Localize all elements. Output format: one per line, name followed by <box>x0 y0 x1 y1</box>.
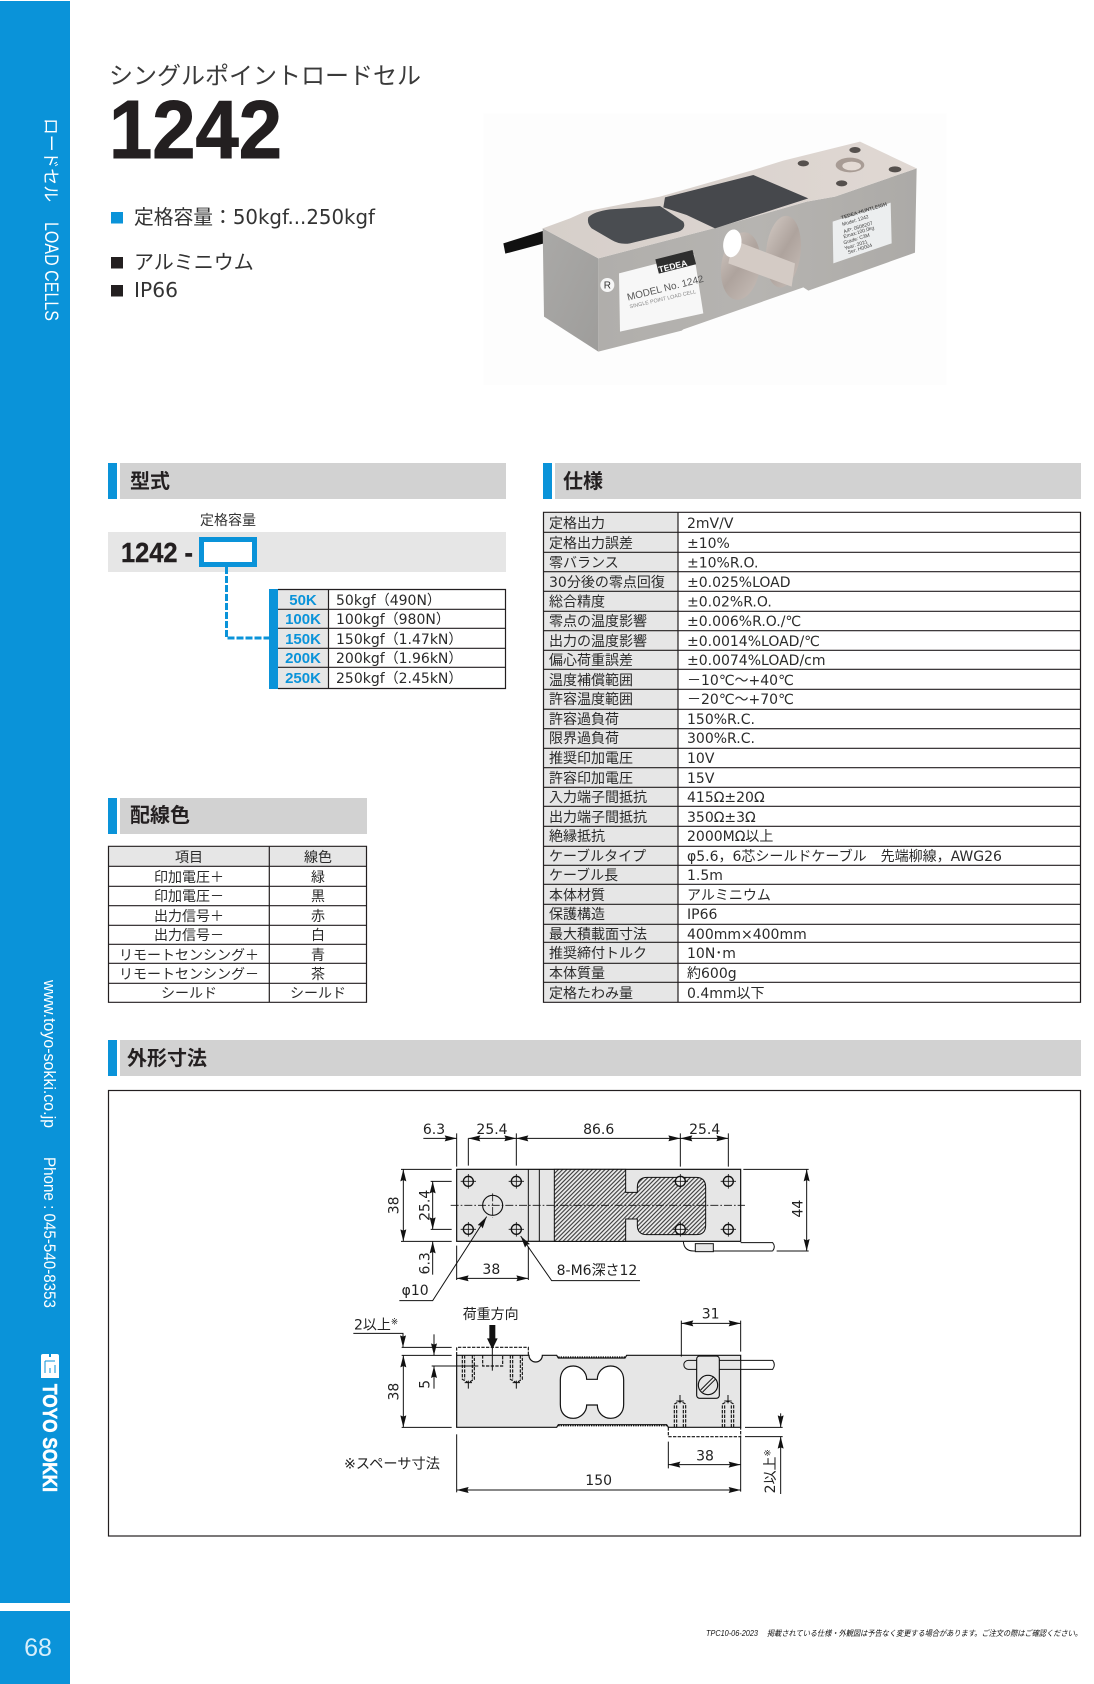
spacer dimension note: ※スペーサ寸法 <box>344 1456 440 1472</box>
leader: M6 threads <box>521 1236 640 1281</box>
row: 青 <box>311 948 325 964</box>
option 100K: 100K <box>285 611 321 628</box>
left dimension lines and values: 25.4 <box>417 1190 433 1221</box>
spec row: 10N･m <box>687 946 736 962</box>
top dimension line and values: 86.6 <box>583 1122 614 1138</box>
row: 茶 <box>311 966 325 983</box>
dimensions panel frame <box>108 1090 1080 1536</box>
spacer note bottom right: 2以上 <box>763 1456 779 1493</box>
product photo: load cell <box>483 113 947 385</box>
row <box>154 870 325 886</box>
left dimension lines and values: 38 <box>386 1196 402 1214</box>
spec row: 15V <box>687 771 715 787</box>
header row: 線色 <box>304 850 332 866</box>
spec row <box>549 574 791 591</box>
spec row: 1.5m <box>687 868 723 884</box>
spec row: 350Ω±3Ω <box>687 810 756 826</box>
dimension drawing: side view <box>344 1306 783 1494</box>
section heading: specifications <box>543 463 1081 499</box>
row: 印加電圧＋ <box>154 870 224 886</box>
spec row: ±10% <box>687 536 730 552</box>
cable stub <box>683 1241 774 1252</box>
section heading: model code <box>108 463 506 499</box>
row: シールド <box>290 986 346 1002</box>
cable and clamp <box>684 1356 774 1398</box>
spec row: 10V <box>687 751 715 767</box>
spec row: 許容温度範囲 <box>549 691 633 708</box>
mounting holes <box>461 1174 736 1237</box>
spec row <box>549 653 826 669</box>
side label: Model: 1242 <box>841 214 870 228</box>
spec row: 30分後の零点回復 <box>549 574 665 591</box>
long side face <box>598 168 917 352</box>
load direction arrow: 荷重方向 <box>463 1307 519 1323</box>
spec row: 約600g <box>687 966 737 982</box>
spec row: 偏心荷重誤差 <box>549 653 633 669</box>
model code prefix: 1242 - <box>121 537 193 568</box>
row: 出力信号－ <box>154 928 224 944</box>
spec row: アルミニウム <box>687 888 771 904</box>
spec row: 本体材質 <box>549 887 605 904</box>
spacer note top <box>353 1317 452 1427</box>
hatched strain area <box>554 1169 706 1241</box>
option 50K: 50K <box>289 592 317 609</box>
spec row: 限界過負荷 <box>549 731 619 747</box>
leader: 10 mm hole <box>399 1217 487 1301</box>
row <box>161 986 346 1002</box>
spec row <box>549 945 736 962</box>
spec row: 150%R.C. <box>687 712 755 728</box>
header row: 項目 <box>175 850 203 866</box>
spec row: ±0.02%R.O. <box>687 594 772 610</box>
feature: protection: IP66 <box>134 278 178 302</box>
dimension drawing: top view <box>386 1122 809 1301</box>
spec row <box>549 691 794 708</box>
title: model number: 1242 <box>109 83 282 176</box>
leader: 10 mm hole: φ10 <box>402 1283 429 1299</box>
top dimension line and values: 25.4 <box>689 1122 720 1138</box>
spec row: ±10%R.O. <box>687 556 758 572</box>
spec row <box>549 672 794 689</box>
cable <box>503 231 544 254</box>
subtitle: シングルポイントロードセル <box>109 63 421 90</box>
row <box>154 909 325 925</box>
option 100K <box>285 611 450 628</box>
150 overall dimension: 150 <box>585 1473 612 1489</box>
spec row: 推奨締付トルク <box>549 945 647 962</box>
option 150K: 150kgf（1.47kN） <box>336 632 462 648</box>
spec row <box>549 536 730 552</box>
feature: material: アルミニウム <box>134 252 254 274</box>
spec row: －10℃～+40℃ <box>687 673 794 689</box>
centre hole <box>483 1195 503 1215</box>
spec row <box>549 594 772 610</box>
row <box>154 928 325 944</box>
top dimension line and values: 25.4 <box>476 1122 508 1138</box>
row <box>154 889 325 905</box>
side label <box>833 201 892 263</box>
spec row: 最大積載面寸法 <box>549 927 647 943</box>
row: 赤 <box>311 909 325 925</box>
spec row <box>549 848 1002 865</box>
option 250K: 250kgf（2.45kN） <box>336 671 462 687</box>
spacers dashed <box>457 1347 741 1437</box>
option 150K: 150K <box>285 631 321 648</box>
R mark <box>600 278 614 292</box>
spec row: ±0.0074%LOAD/cm <box>687 653 826 669</box>
spec row: 零点の温度影響 <box>549 614 647 630</box>
feature: protection <box>111 278 178 302</box>
38 bottom dimension: 38 <box>696 1449 714 1465</box>
spec row: 入力端子間抵抗 <box>549 790 647 806</box>
31 dimension: 31 <box>702 1306 720 1322</box>
spec row <box>549 770 715 787</box>
front label: SINGLE POINT LOAD CELL <box>629 289 697 310</box>
sidebar text: phone: Phone : 045-540-8353 <box>40 1157 59 1308</box>
left dimension lines and values <box>386 1169 452 1275</box>
spec row <box>549 790 765 806</box>
page number block: 68 <box>24 1634 52 1662</box>
spec row: 本体質量 <box>549 965 605 982</box>
5 depth dimension <box>417 1334 478 1389</box>
spec row: 保護構造 <box>549 907 605 923</box>
5 depth dimension: 5 <box>417 1380 433 1389</box>
spec row: ケーブルタイプ <box>549 848 646 865</box>
row: 白 <box>311 928 325 944</box>
spec row: －20℃～+70℃ <box>687 692 794 708</box>
top face <box>543 142 917 258</box>
spec row <box>549 556 758 572</box>
spec row <box>549 907 717 923</box>
spec row: 絶縁抵抗 <box>549 828 605 845</box>
header row <box>175 850 332 866</box>
spec row: 温度補償範囲 <box>549 672 633 689</box>
spec row: 定格出力誤差 <box>549 536 633 552</box>
dashed connector <box>226 567 269 638</box>
spec row: ±0.006%R.O./℃ <box>687 614 801 630</box>
spec row <box>549 711 755 728</box>
front label <box>619 250 705 332</box>
row <box>119 948 325 964</box>
spec row <box>549 828 773 845</box>
front label: MODEL No. 1242 <box>626 274 705 304</box>
company logo wordmark: TOYO SOKKI <box>38 1384 60 1492</box>
31 dimension <box>681 1306 741 1357</box>
top mounting holes <box>798 147 901 186</box>
spec row <box>549 634 820 650</box>
top view body <box>457 1169 741 1241</box>
top dimension line and values: 6.3 <box>423 1122 445 1138</box>
spacer note top: ※ <box>391 1318 398 1328</box>
centre recess <box>483 1348 503 1371</box>
spec row <box>549 867 723 884</box>
spec row: ±0.0014%LOAD/℃ <box>687 634 820 650</box>
spec row: IP66 <box>687 907 717 923</box>
option 100K: 100kgf（980N） <box>336 612 450 628</box>
model code diagram <box>108 512 506 689</box>
side label: Grade: C3M <box>843 233 871 246</box>
sidebar text: website: www.toyo-sokki.co.jp <box>40 979 59 1128</box>
row: 黒 <box>311 889 325 905</box>
through cut-out <box>717 214 804 302</box>
spec row <box>549 751 715 767</box>
38 height dimension <box>386 1355 403 1427</box>
side view body <box>457 1355 741 1427</box>
sidebar text: category <box>40 118 61 321</box>
spec row: 定格出力 <box>549 516 605 532</box>
38 bottom dimension <box>668 1437 741 1492</box>
option 250K <box>285 670 462 687</box>
bottom 38 dimension <box>457 1246 528 1280</box>
option 50K: 50kgf（490N） <box>336 593 441 609</box>
capacity label: 定格容量 <box>200 512 256 528</box>
side label: A/P: 0508207 <box>843 221 874 235</box>
spec row <box>549 731 755 747</box>
spec row: 400mm×400mm <box>687 927 807 943</box>
spec row: φ5.6，6芯シールドケーブル 先端柳線，AWG26 <box>687 848 1002 865</box>
row: 印加電圧－ <box>154 889 224 905</box>
top dimension line and values <box>423 1122 728 1167</box>
spec row: 推奨印加電圧 <box>549 751 633 767</box>
spec row <box>549 927 807 943</box>
blank code box <box>202 540 254 564</box>
spec row: 出力の温度影響 <box>549 634 647 650</box>
threaded holes <box>462 1355 734 1427</box>
spec row <box>549 516 734 532</box>
spec row: 許容過負荷 <box>549 711 619 728</box>
section heading: dimensions <box>108 1040 1081 1076</box>
side label: TEDEA-HUNTLEIGH <box>840 201 888 221</box>
row: 出力信号＋ <box>154 909 224 925</box>
spec row: 415Ω±20Ω <box>687 790 765 806</box>
spec row: 300%R.C. <box>687 731 755 747</box>
blue sidebar <box>0 1 70 1603</box>
dark pocket <box>588 206 684 244</box>
left dimension lines and values: 6.3 <box>417 1252 433 1274</box>
option 200K: 200kgf（1.96kN） <box>336 651 462 667</box>
spec row: 出力端子間抵抗 <box>549 810 647 826</box>
option 250K: 250K <box>285 670 321 687</box>
spec row <box>549 810 756 826</box>
model code band <box>108 532 506 572</box>
spec row <box>549 614 801 630</box>
spec row: 定格たわみ量 <box>549 986 633 1002</box>
end face <box>543 228 598 352</box>
leader: M6 threads: 8-M6深さ12 <box>557 1263 637 1279</box>
front label: TEDEA <box>657 258 689 275</box>
wire colour table <box>108 846 367 1002</box>
section heading: wire colours <box>108 798 367 834</box>
capacity options table <box>269 589 506 689</box>
spec row: 総合精度 <box>549 594 605 610</box>
H-shaped cut-out <box>560 1366 624 1418</box>
option 150K <box>285 631 462 648</box>
bottom 38 dimension: 38 <box>482 1262 500 1278</box>
spec row: 許容印加電圧 <box>549 770 633 787</box>
section heading: dimensions: 外形寸法 <box>127 1047 207 1070</box>
spec row: 0.4mm以下 <box>687 986 765 1002</box>
spacer note bottom right: ※ <box>763 1449 773 1456</box>
option 200K: 200K <box>285 650 321 667</box>
sidebar text: category: ロードセル <box>41 118 60 202</box>
section heading: model code: 型式 <box>130 470 170 493</box>
row: リモートセンシング－ <box>119 967 259 983</box>
option 50K <box>289 592 441 609</box>
spec row <box>549 965 737 982</box>
spec row: 2mV/V <box>687 516 734 532</box>
spec row: ケーブル長 <box>549 867 618 884</box>
side label: Emax:100.0kg <box>843 225 875 240</box>
load direction arrow <box>463 1307 519 1349</box>
option 200K <box>285 650 462 667</box>
sidebar text: category: LOAD CELLS <box>40 222 61 321</box>
spacer note bottom right <box>745 1413 783 1494</box>
spacer note top: 2以上 <box>354 1317 391 1333</box>
spec row: 零バランス <box>549 556 619 572</box>
spec row: 2000MΩ以上 <box>687 829 773 845</box>
R mark: R <box>604 281 611 292</box>
spec row <box>549 986 765 1002</box>
right 44 dimension: 44 <box>791 1200 807 1218</box>
icon: company logo mark <box>41 1354 59 1378</box>
section heading: wire colours: 配線色 <box>130 804 190 827</box>
row: 緑 <box>311 870 325 886</box>
row: シールド <box>161 986 217 1002</box>
side label: Ser: H0004 <box>847 243 873 256</box>
38 height dimension: 38 <box>386 1383 402 1401</box>
row: リモートセンシング＋ <box>119 948 259 964</box>
side label: Year: 2021 <box>844 239 869 252</box>
row <box>119 966 325 983</box>
specifications table <box>543 512 1081 1002</box>
spec row <box>549 887 771 904</box>
spec row: ±0.025%LOAD <box>687 575 791 591</box>
feature: capacity: 定格容量：50kgf...250kgf <box>134 205 376 229</box>
footer note: TPC10-06-2023 <box>706 1628 758 1638</box>
right 44 dimension <box>743 1169 809 1251</box>
dark sealed strip <box>663 175 808 228</box>
section heading: specifications: 仕様 <box>563 470 603 493</box>
page number block <box>0 1611 70 1684</box>
